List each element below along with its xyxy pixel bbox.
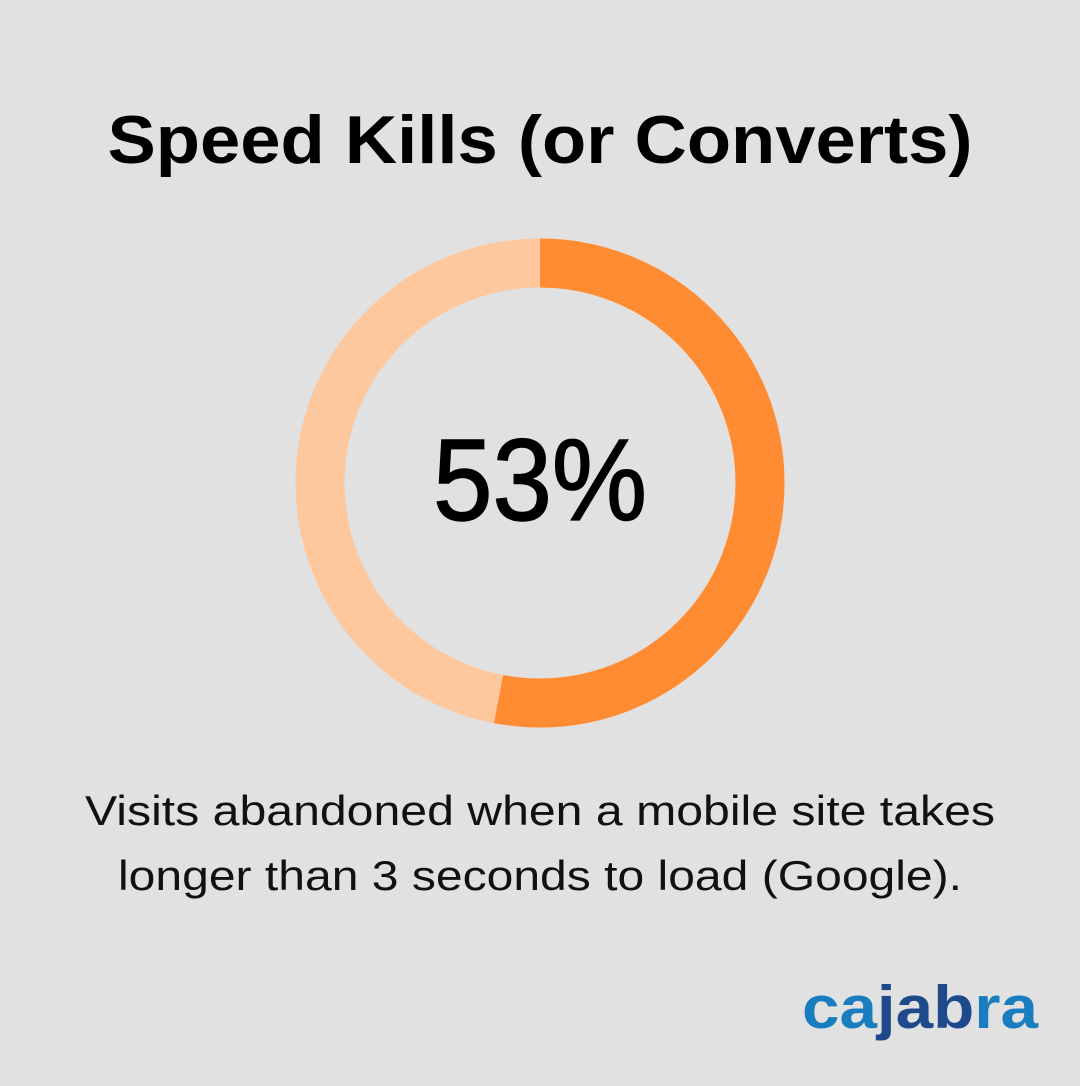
- percentage value: 53%: [433, 415, 647, 545]
- description text: longer than 3 seconds to load (Google).: [118, 852, 962, 899]
- title: Speed Kills (or Converts): [108, 102, 972, 178]
- description text: Visits abandoned when a mobile site takes: [85, 787, 995, 834]
- logo: cajabra: cajabra: [802, 974, 1039, 1041]
- donut chart: [320, 263, 760, 703]
- description text: [85, 787, 995, 899]
